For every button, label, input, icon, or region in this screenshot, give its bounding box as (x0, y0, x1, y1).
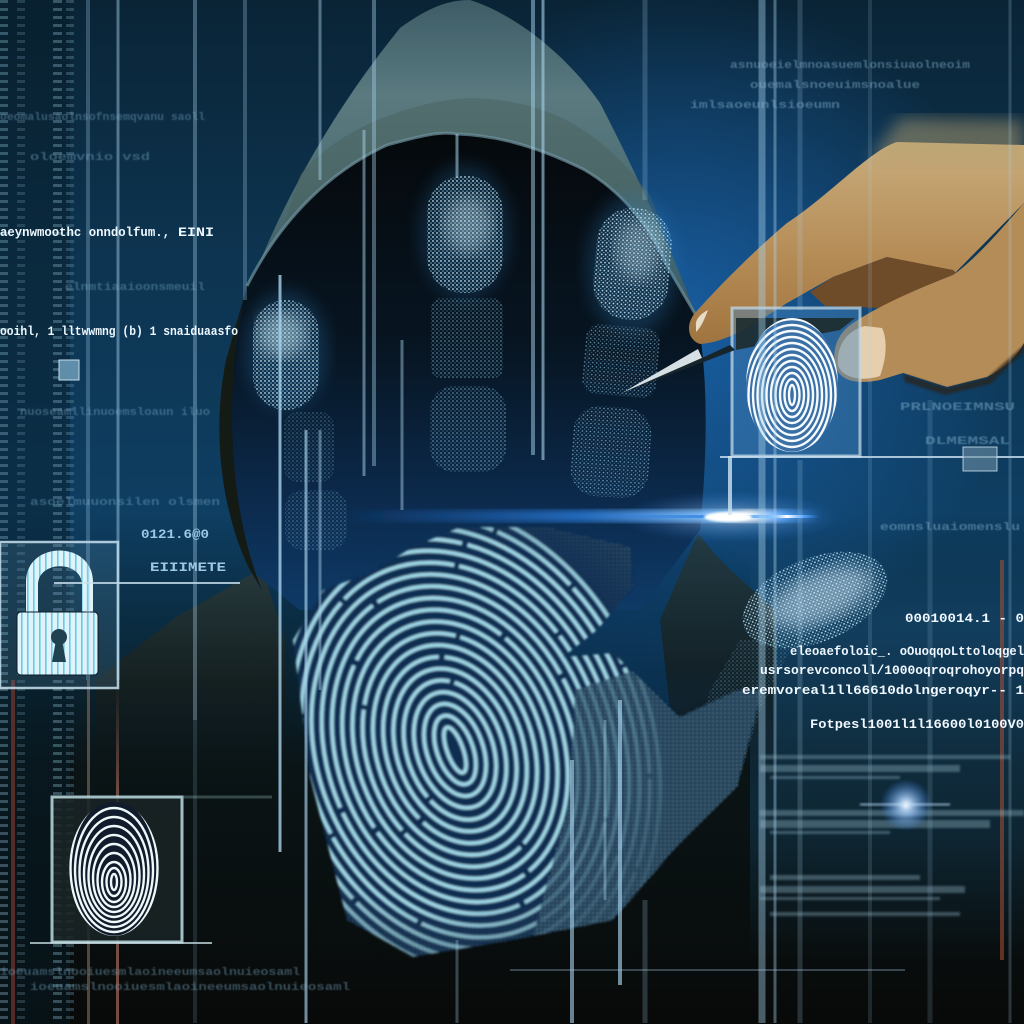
scanned fingerprint panel (732, 308, 860, 471)
left data text: aeynwmoothc onndolfum., (0, 225, 170, 240)
hood rim highlight (247, 133, 697, 317)
left data text: 0121.6@0 (141, 527, 209, 542)
right faint text: eomnsluaiomenslu (880, 522, 1020, 534)
left faint text: nuoseamllinuoemsloaun iluo (20, 407, 210, 419)
right faint text: DLMEMSAL (925, 436, 1011, 448)
right data text (742, 611, 1024, 732)
left data text: EINI (178, 225, 214, 240)
right data text: eremvoreal1ll66610dolngeroqyr-- 1 (742, 683, 1024, 698)
face shadow (231, 133, 706, 610)
right lower data bars (760, 755, 1024, 916)
right faint text (690, 60, 1020, 534)
stylus (622, 345, 735, 393)
small status square (59, 360, 79, 380)
finger one (244, 290, 347, 550)
left faint text: oeomalusaolnsofnsemqvanu saoll (0, 112, 205, 124)
finger three (569, 195, 678, 500)
light spark (860, 779, 950, 831)
right data text: usrsorevconcoll/1000oqroqrohoyorpq (760, 663, 1024, 678)
left faint text: asoelmuuonsilen olsmen (30, 497, 220, 509)
hood (219, 0, 704, 600)
right faint text: asnuoeielmnoasuemlonsiuaolneoim (730, 60, 970, 72)
left faint text (0, 112, 351, 994)
palm fingerprint (292, 526, 762, 958)
hood side shadow (219, 286, 262, 590)
left data text: ooihl, 1 lltwwmng (b) 1 snaiduaasfo (0, 324, 238, 339)
lens flare (340, 491, 840, 543)
right data text: Fotpesl1001l1l16600l0100V0 (810, 717, 1024, 732)
lower fingerprint panel (30, 790, 272, 943)
left data text (0, 225, 238, 575)
right data text: 00010014.1 - 0 (905, 611, 1024, 626)
shoulders (95, 533, 775, 800)
left faint text: ioeuamslnooiuesmlaoineeumsaolnuieosaml (30, 982, 351, 994)
thumb print (690, 533, 901, 787)
lock panel (0, 542, 240, 688)
left faint text: oloemvnio vsd (30, 152, 150, 164)
finger two (419, 164, 511, 472)
left faint text: ioeuamslnooiuesmlaoineeumsaolnuieosaml (0, 967, 300, 979)
hand (689, 118, 1024, 395)
left data text: EIIIMETE (150, 560, 226, 575)
right faint text: PRLNOEIMNSU (900, 402, 1015, 414)
right faint text: ouemalsnoeuimsnoalue (750, 80, 921, 92)
sensor link line (720, 447, 1024, 515)
left faint text: elnmtiaaioonsmeuil (65, 282, 205, 294)
right faint text: imlsaoeunlsioeumn (690, 100, 840, 112)
